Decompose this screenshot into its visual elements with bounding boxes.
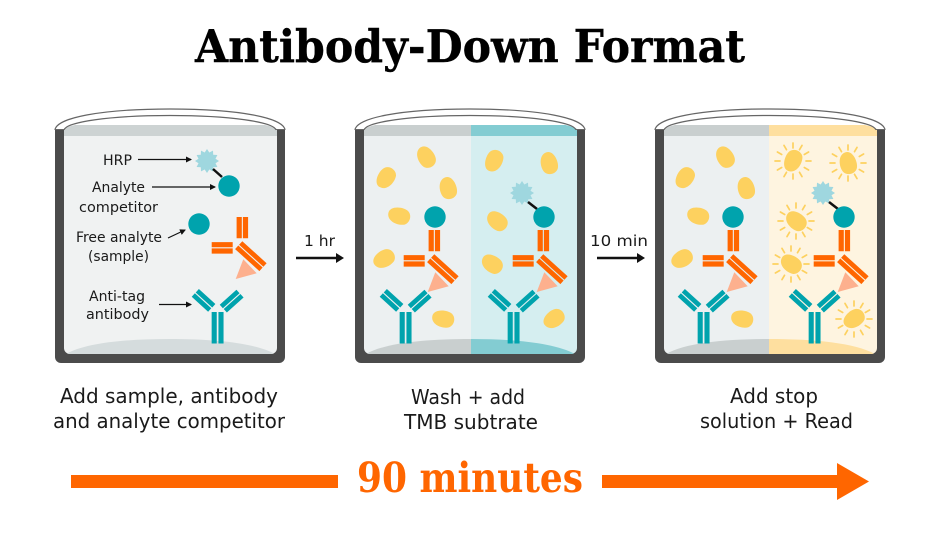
- panel: step 1 well: [55, 109, 285, 363]
- antibody complex right with HRP: [790, 181, 867, 344]
- glowing substrate blobs: [773, 143, 872, 337]
- panel: step 2 well: [355, 109, 585, 363]
- arrow: 1 hr: [296, 232, 344, 263]
- arrow: 10 min: [590, 232, 648, 263]
- label: analyte competitor: Analyte: [92, 180, 145, 196]
- arrow: HRP: [138, 158, 191, 160]
- caption: step 1: Add sample, antibody: [60, 384, 278, 408]
- label: HRP: HRP: [103, 153, 132, 169]
- icon: orange antibody: [212, 217, 265, 279]
- label: anti-tag antibody: Anti-tag: [89, 289, 145, 305]
- arrow: 10 min: 10 min: [590, 232, 648, 250]
- yellow substrate blobs: [370, 143, 568, 332]
- arrow: anti-tag antibody: [159, 304, 191, 306]
- caption: step 3: Add stop: [730, 384, 818, 408]
- label: analyte competitor: competitor: [79, 200, 158, 216]
- caption: step 2: TMB subtrate: [403, 410, 538, 434]
- label: free analyte: Free analyte: [76, 230, 162, 246]
- label: free analyte: (sample): [88, 249, 149, 265]
- connector: HRP to competitor: [213, 169, 222, 177]
- title: Antibody-Down Format: [194, 20, 745, 73]
- antibody complex right with HRP: [489, 181, 566, 344]
- antibody complex left: [381, 206, 457, 344]
- arrow: free analyte: [168, 230, 185, 238]
- panel: step 3 well: [655, 109, 885, 363]
- timeline arrow right: [602, 463, 869, 500]
- label: anti-tag antibody: antibody: [86, 307, 149, 323]
- icon: analyte competitor: [218, 175, 240, 197]
- timeline bar left: [71, 475, 338, 488]
- icon: HRP star: [195, 149, 219, 173]
- arrow: analyte competitor: [152, 186, 215, 188]
- caption: step 1: and analyte competitor: [53, 409, 286, 433]
- antibody complex left: [679, 206, 756, 344]
- icon: anti-tag antibody: [193, 291, 242, 344]
- yellow substrate blobs: [668, 143, 758, 329]
- arrow: 1 hr: 1 hr: [304, 232, 336, 250]
- caption: step 3: solution + Read: [700, 409, 853, 433]
- icon: free analyte: [188, 213, 210, 235]
- caption: step 2: Wash + add: [411, 385, 525, 409]
- timeline label: 90 minutes: [357, 454, 583, 502]
